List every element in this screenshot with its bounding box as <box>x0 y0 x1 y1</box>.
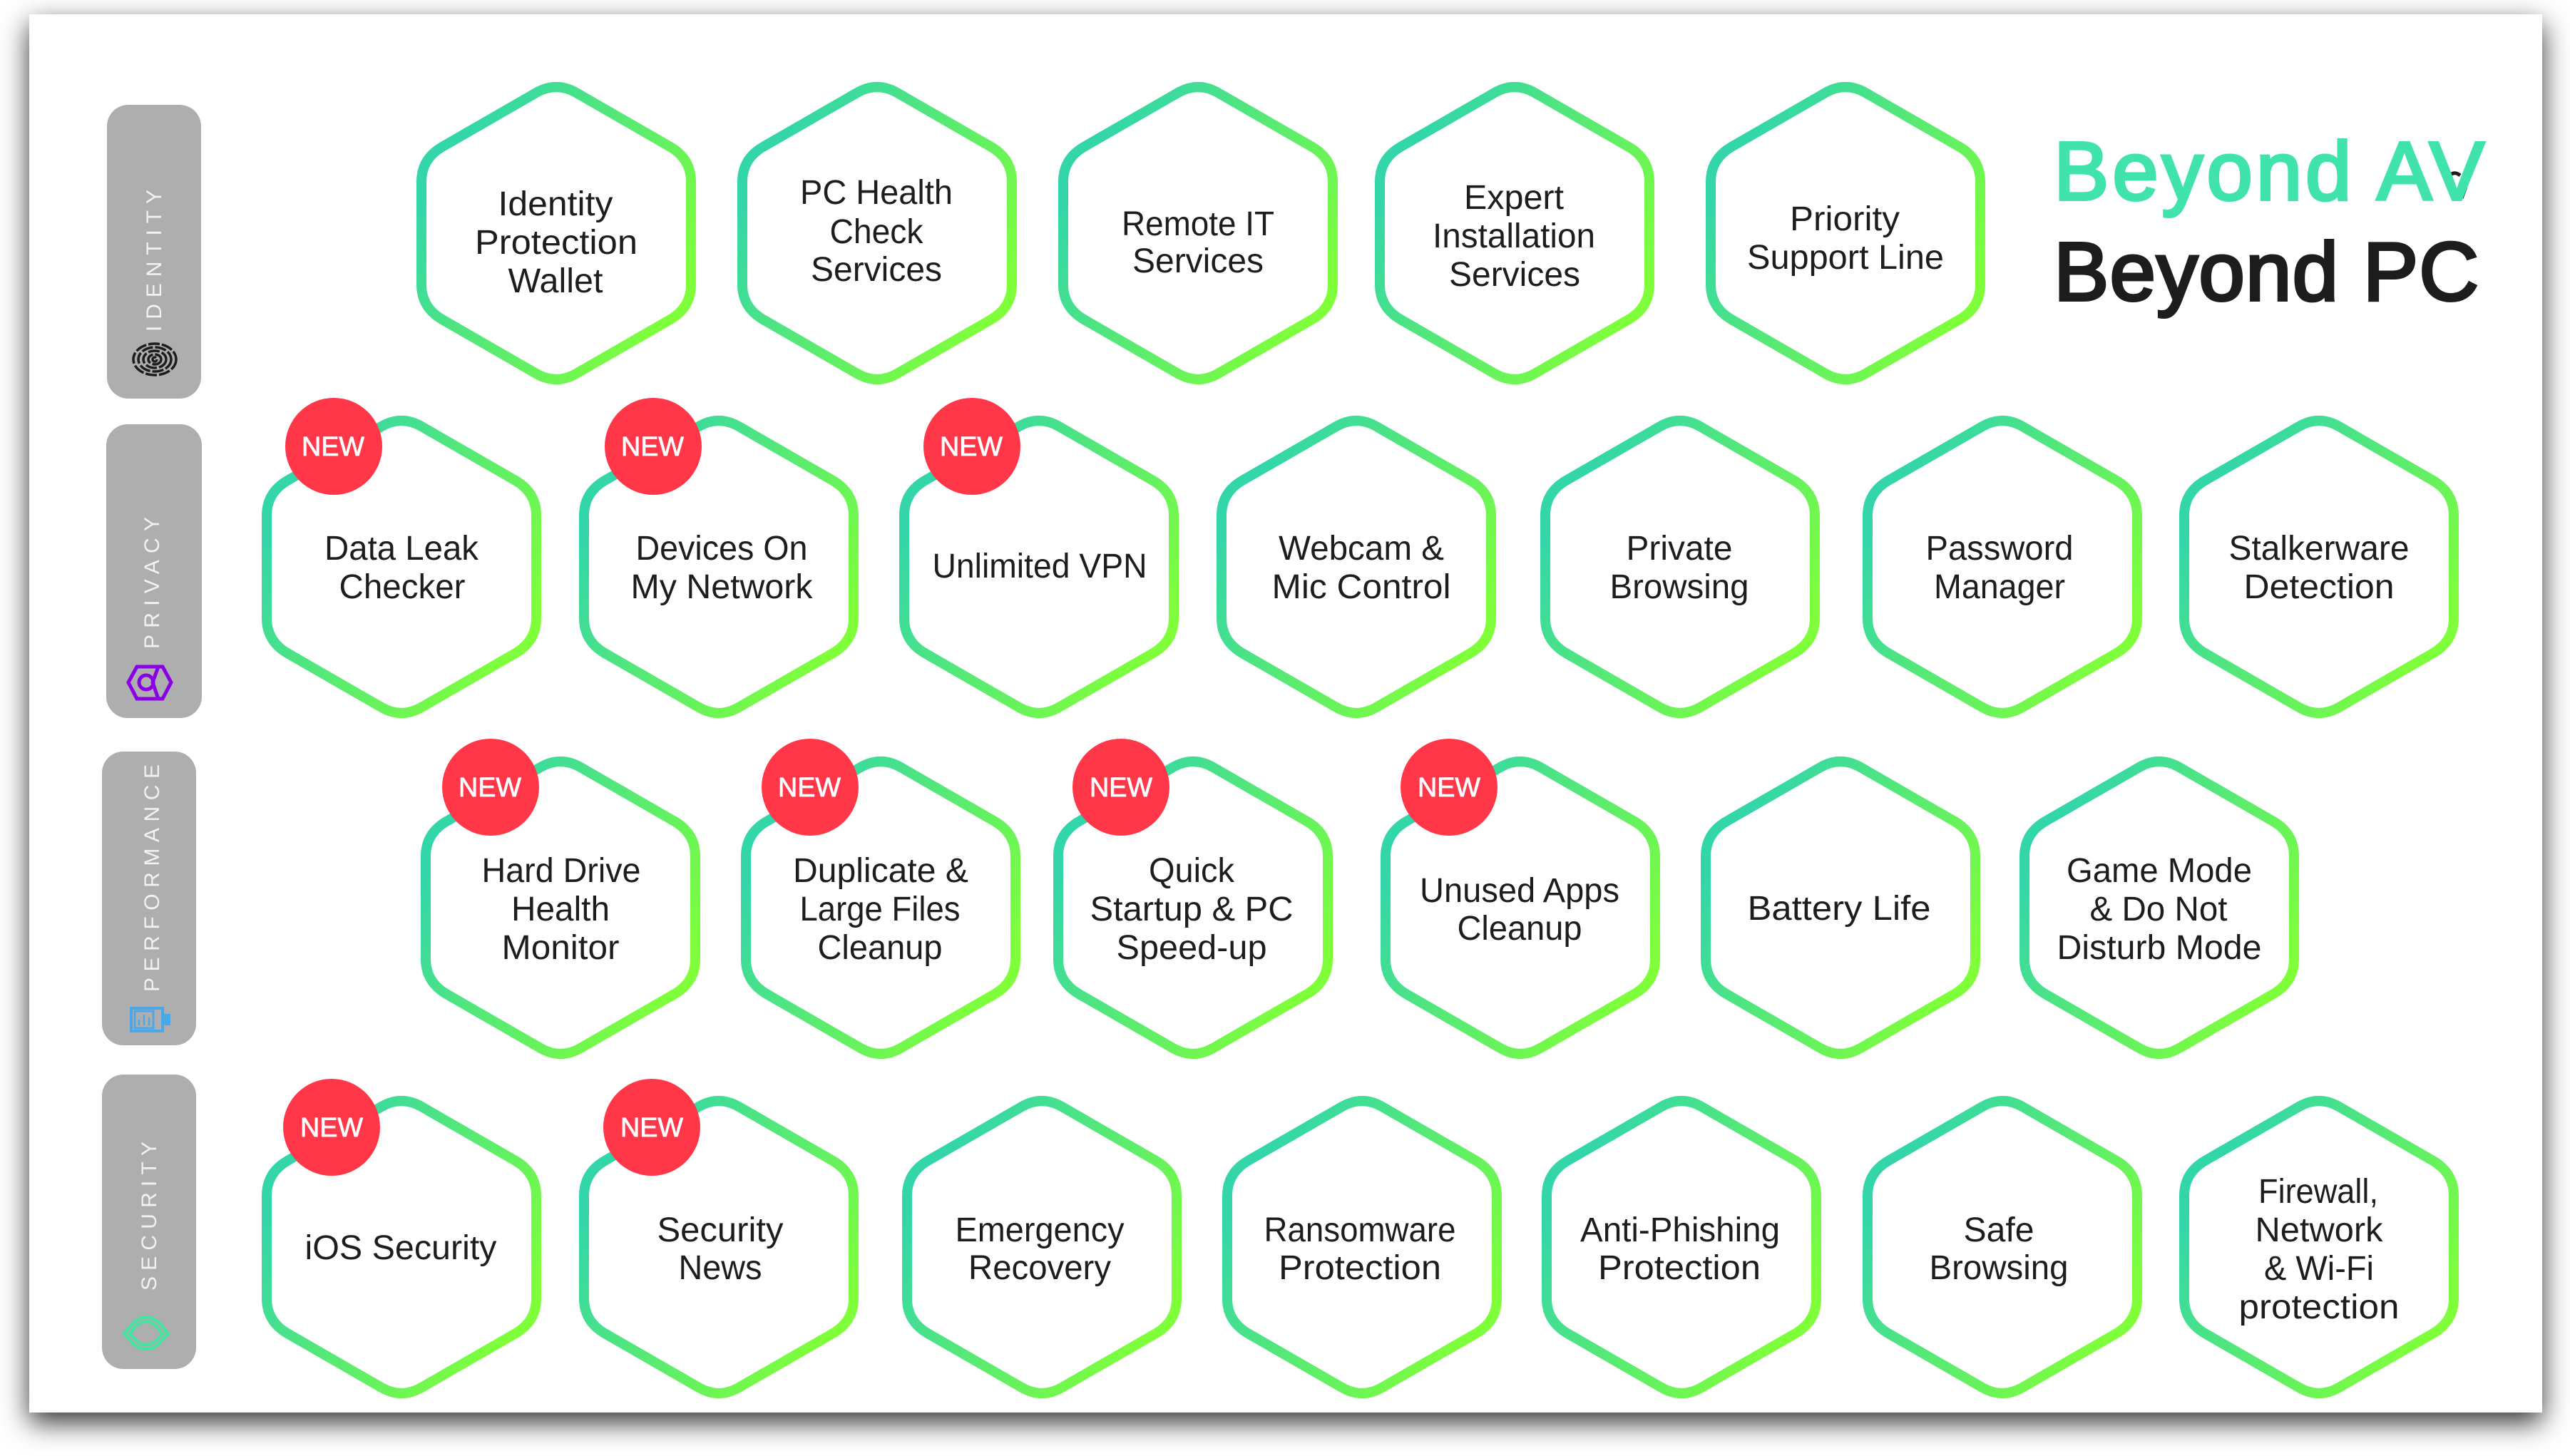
hexagon: Anti-Phishing Protection: Anti-Phishing <box>1580 1211 1780 1249</box>
badge: new: NEW <box>302 432 364 462</box>
hexagon: Firewall, Network & Wi-Fi protection: & Wi-Fi <box>2264 1250 2374 1288</box>
hexagon: Unused Apps Cleanup: Unused Apps <box>1420 872 1619 910</box>
hexagon: Expert Installation Services <box>1380 87 1649 379</box>
hexagon: Security News: News <box>679 1249 762 1287</box>
badge: new: NEW <box>940 432 1003 462</box>
hexagon: Webcam & Mic Control: Mic Control <box>1272 568 1450 606</box>
hexagon: Remote IT Services <box>1063 87 1333 379</box>
hexagon: Anti-Phishing Protection: Protection <box>1598 1249 1761 1287</box>
hexagon: Game Mode & Do Not Disturb Mode <box>2024 762 2294 1054</box>
label: identity: IDENTITY <box>143 190 166 332</box>
hexagon: Hard Drive Health Monitor <box>426 739 695 1054</box>
hexagon: Game Mode & Do Not Disturb Mode: Disturb Mode <box>2057 929 2262 967</box>
badge: new <box>1401 739 1498 836</box>
hexagon: Duplicate & Large Files Cleanup: Cleanup <box>817 929 943 967</box>
hexagon: Game Mode & Do Not Disturb Mode: & Do Not <box>2089 891 2228 928</box>
hexagon: Remote IT Services: Remote IT <box>1122 205 1274 243</box>
hexagon: Quick Startup & PC Speed-up: Speed-up <box>1117 929 1266 967</box>
hexagon: Devices On My Network <box>584 398 854 713</box>
hexagon: Identity Protection Wallet: Protection <box>475 224 638 262</box>
hexagon: Duplicate & Large Files Cleanup: Large Files <box>800 891 960 928</box>
icon: privacy hexagon <box>128 667 171 699</box>
icon: battery chart <box>131 1008 169 1031</box>
badge: new: NEW <box>621 432 684 462</box>
title: Beyond PC: Beyond PC <box>2054 225 2479 318</box>
hexagon: Unused Apps Cleanup <box>1386 739 1655 1054</box>
badge: new: NEW <box>300 1113 363 1143</box>
hexagon: Data Leak Checker <box>267 398 536 713</box>
hexagon: Security News <box>584 1079 854 1393</box>
hexagon: Ransomware Protection: Ransomware <box>1264 1211 1456 1249</box>
hexagon: Devices On My Network: My Network <box>630 568 814 606</box>
label: performance: PERFORMANCE <box>140 764 164 992</box>
badge: new <box>603 1079 700 1176</box>
badge: new: NEW <box>1090 773 1152 803</box>
hexagon: Emergency Recovery <box>907 1101 1177 1393</box>
hexagon: Duplicate & Large Files Cleanup <box>746 739 1015 1054</box>
badge: new: NEW <box>1418 773 1480 803</box>
hexagon: Identity Protection Wallet: Identity <box>498 185 613 223</box>
hexagon: Unlimited VPN <box>904 398 1174 713</box>
hexagon: Emergency Recovery: Emergency <box>956 1211 1124 1249</box>
icon: security rings <box>124 1318 168 1349</box>
hexagon: Firewall, Network & Wi-Fi protection: Network <box>2255 1211 2384 1249</box>
hexagon: Stalkerware Detection: Stalkerware <box>2229 530 2409 568</box>
hexagon: Duplicate & Large Files Cleanup: Duplicate & <box>793 852 968 890</box>
hexagon: Password Manager: Manager <box>1934 568 2065 606</box>
hexagon: Ransomware Protection <box>1227 1101 1497 1393</box>
hexagon: Password Manager: Password <box>1925 530 2074 568</box>
badge: new: NEW <box>620 1113 683 1143</box>
hexagon: Firewall, Network & Wi-Fi protection <box>2184 1101 2454 1393</box>
hexagon: Safe Browsing: Safe <box>1964 1211 2034 1249</box>
hexagon: Quick Startup & PC Speed-up: Startup & PC <box>1090 891 1294 928</box>
badge: new <box>442 739 539 836</box>
hexagon: Firewall, Network & Wi-Fi protection: Firewall, <box>2258 1173 2378 1211</box>
hexagon: Webcam & Mic Control: Webcam & <box>1279 530 1444 568</box>
hexagon: Stalkerware Detection: Detection <box>2243 568 2395 606</box>
hexagon: PC Health Check Services <box>742 87 1012 379</box>
hexagon: Stalkerware Detection <box>2184 421 2454 713</box>
hexagon: PC Health Check Services: PC Health <box>800 174 953 212</box>
hexagon: Identity Protection Wallet: Wallet <box>508 262 603 300</box>
hexagon: Password Manager <box>1868 421 2137 713</box>
hexagon: Data Leak Checker: Checker <box>339 568 466 606</box>
hexagon: PC Health Check Services: Check <box>830 213 923 251</box>
badge: new <box>605 398 702 495</box>
hexagon: Security News: Security <box>657 1211 783 1249</box>
hexagon: Emergency Recovery: Recovery <box>968 1249 1111 1287</box>
hexagon: Ransomware Protection: Protection <box>1279 1249 1441 1287</box>
hexagon: Expert Installation Services: Services <box>1449 256 1580 294</box>
hexagon: iOS Security: iOS Security <box>305 1229 496 1267</box>
hexagon: iOS Security <box>267 1079 536 1393</box>
sidebar: identity <box>107 105 201 399</box>
hexagon: Firewall, Network & Wi-Fi protection: protection <box>2239 1288 2399 1326</box>
badge: new <box>762 739 859 836</box>
hexagon: Private Browsing: Browsing <box>1610 568 1749 606</box>
stray mark behind title <box>2447 173 2466 198</box>
title: Beyond AV: Beyond AV <box>2054 125 2484 217</box>
hexagon: Safe Browsing: Browsing <box>1930 1249 2068 1287</box>
sidebar: privacy <box>106 424 202 718</box>
hexagon: Priority Support Line <box>1711 87 1980 379</box>
hexagon: PC Health Check Services: Services <box>811 251 942 289</box>
hexagon: Identity Protection Wallet <box>421 87 691 379</box>
hexagon: Battery Life: Battery Life <box>1747 890 1931 928</box>
badge: new <box>1072 739 1169 836</box>
hexagon: Unused Apps Cleanup: Cleanup <box>1458 910 1582 948</box>
hexagon: Priority Support Line: Support Line <box>1747 239 1944 277</box>
badge: new: NEW <box>459 773 521 803</box>
hexagon: Safe Browsing <box>1868 1101 2137 1393</box>
hexagon: Expert Installation Services: Installation <box>1433 217 1595 255</box>
hexagon: Hard Drive Health Monitor: Hard Drive <box>482 852 640 890</box>
hexagon: Battery Life <box>1706 762 1975 1054</box>
hexagon: Remote IT Services: Services <box>1132 242 1264 280</box>
hexagon: Data Leak Checker: Data Leak <box>324 530 479 568</box>
hexagon: Webcam & Mic Control <box>1222 421 1491 713</box>
label: security: SECURITY <box>138 1142 161 1291</box>
hexagon: Private Browsing <box>1545 421 1815 713</box>
hexagon: Hard Drive Health Monitor: Monitor <box>502 929 620 967</box>
hexagon: Anti-Phishing Protection <box>1547 1101 1816 1393</box>
hexagon: Unlimited VPN: Unlimited VPN <box>933 548 1147 585</box>
badge: new <box>285 398 382 495</box>
hexagon: Quick Startup & PC Speed-up: Quick <box>1149 852 1235 890</box>
hexagon: Private Browsing: Private <box>1626 530 1733 568</box>
sidebar: performance <box>102 752 196 1045</box>
hexagon: Devices On My Network: Devices On <box>636 530 807 568</box>
icon: fingerprint <box>133 344 176 375</box>
hexagon: Expert Installation Services: Expert <box>1464 179 1564 217</box>
badge: new: NEW <box>778 773 841 803</box>
badge: new <box>283 1079 380 1176</box>
sidebar: security <box>102 1075 196 1369</box>
hexagon: Priority Support Line: Priority <box>1790 200 1900 238</box>
hexagon: Game Mode & Do Not Disturb Mode: Game Mode <box>2067 852 2252 890</box>
hexagon: Quick Startup & PC Speed-up <box>1058 739 1328 1054</box>
badge: new <box>923 398 1020 495</box>
label: privacy: PRIVACY <box>140 517 164 649</box>
hexagon: Hard Drive Health Monitor: Health <box>511 891 610 928</box>
